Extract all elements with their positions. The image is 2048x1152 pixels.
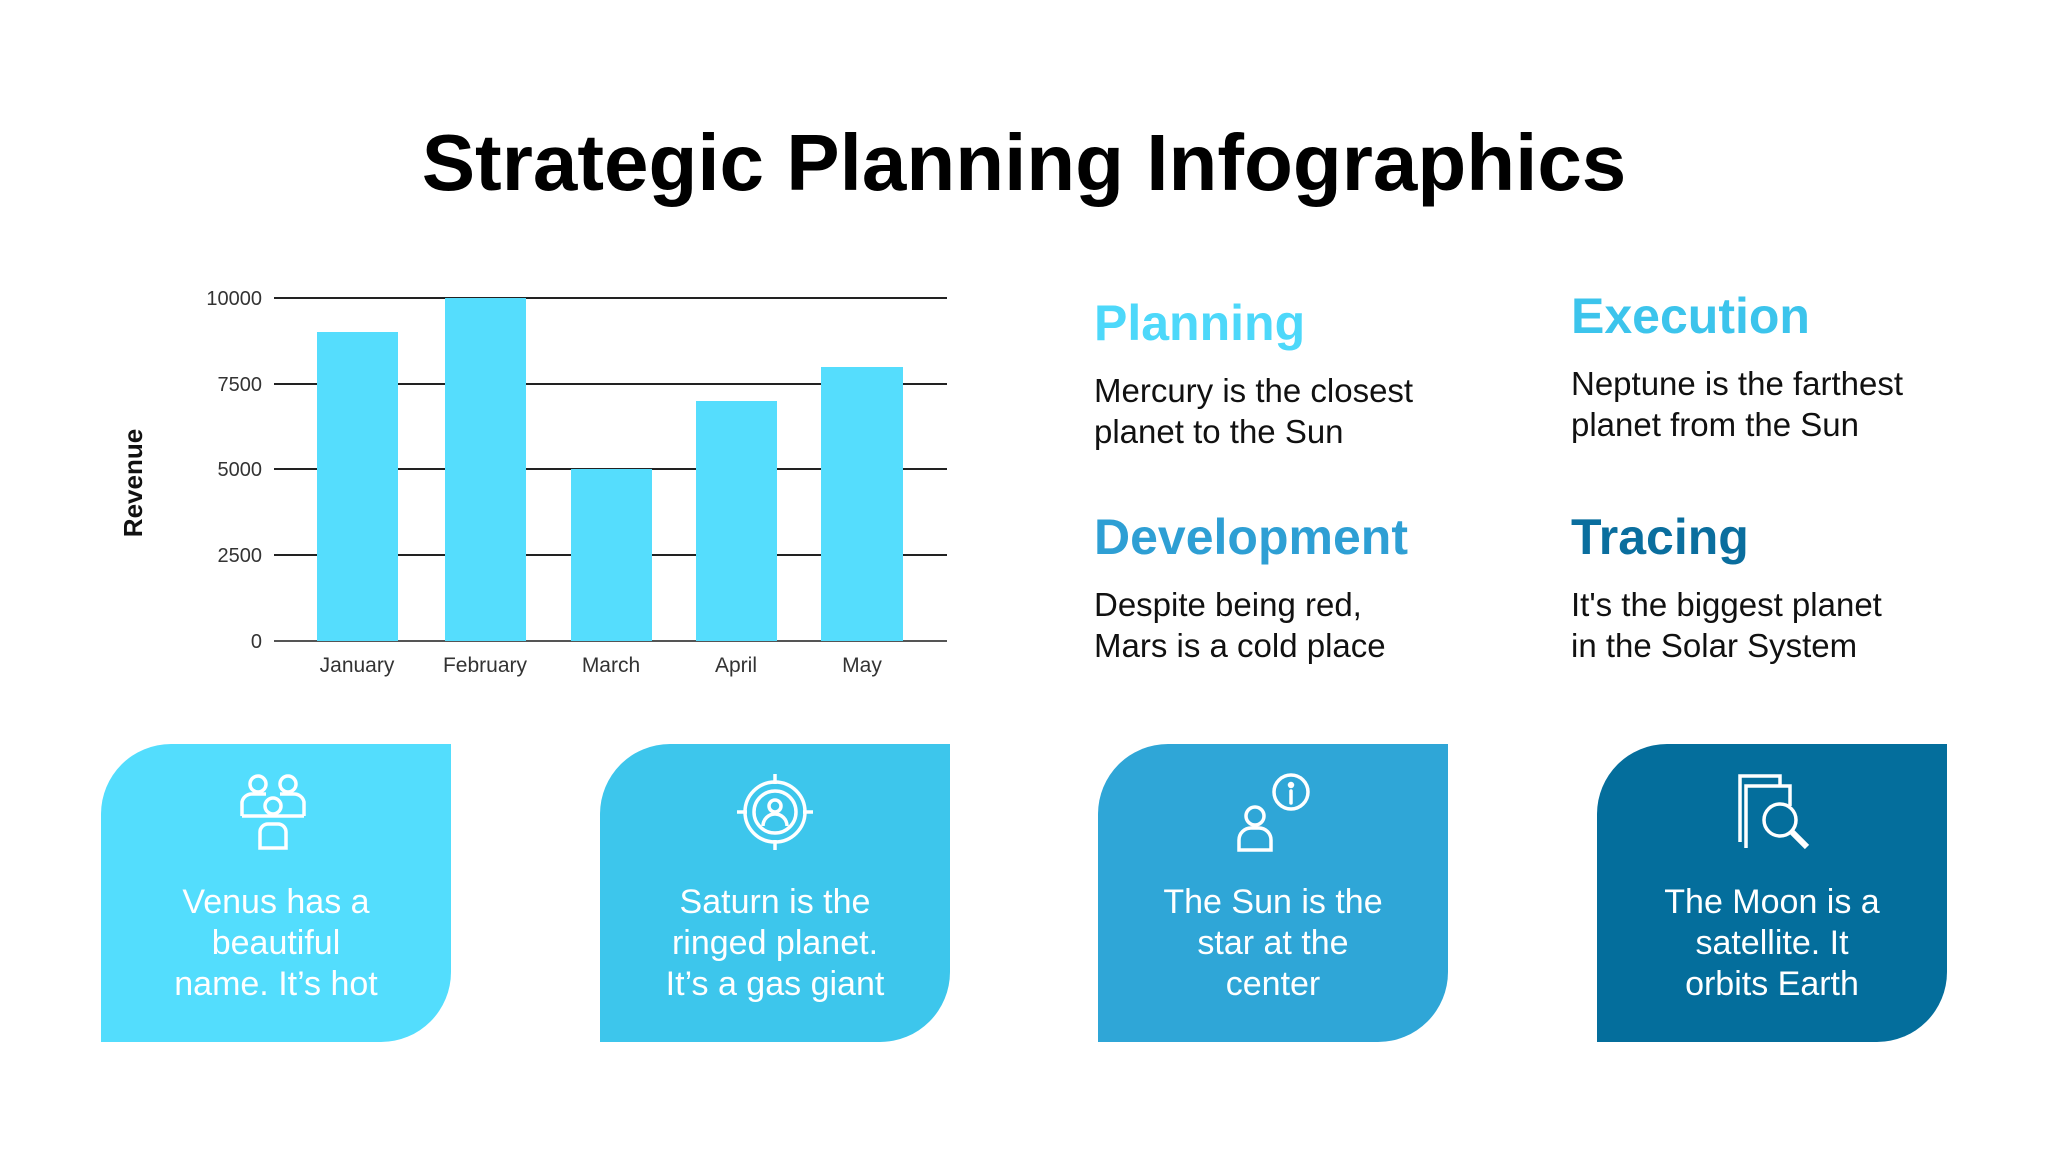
block: execution: planet from the Sun (1571, 406, 1859, 443)
bar chart: 2500 (218, 545, 262, 567)
block: development: Mars is a cold place (1094, 627, 1386, 664)
icon: target person (737, 774, 813, 850)
card: moon: orbits Earth (1685, 965, 1859, 1003)
block: tracing (1571, 509, 1882, 664)
card: venus: beautiful (212, 924, 340, 962)
bar chart: May (842, 654, 882, 677)
bar chart (118, 288, 947, 677)
bar chart: 7500 (218, 374, 262, 396)
card: saturn: Saturn is the (680, 883, 870, 921)
icon: document search (1738, 774, 1810, 850)
card: sun: The Sun is the (1163, 883, 1383, 921)
bar chart: February (443, 654, 528, 677)
card: venus: Venus has a (182, 883, 370, 921)
block: planning: planet to the Sun (1094, 413, 1344, 450)
bar chart: January (320, 654, 395, 677)
block: tracing: in the Solar System (1571, 627, 1857, 664)
block: tracing: Tracing (1571, 509, 1749, 565)
bar chart: 5000 (218, 459, 262, 481)
block: planning (1094, 295, 1413, 450)
bar chart: Revenue (118, 429, 148, 537)
block: execution: Execution (1571, 288, 1810, 344)
card: sun: center (1226, 965, 1320, 1003)
card: moon: The Moon is a (1664, 883, 1880, 921)
block: tracing: It's the biggest planet (1571, 586, 1882, 623)
block: development: Development (1094, 509, 1408, 565)
card: venus (101, 744, 451, 1042)
card: sun: star at the (1197, 924, 1349, 962)
title: Strategic Planning Infographics (422, 118, 1626, 207)
block: execution: Neptune is the farthest (1571, 365, 1903, 402)
card: saturn (600, 744, 950, 1042)
card: venus: name. It’s hot (174, 965, 378, 1003)
icon: person info (1237, 773, 1310, 852)
block: development: Despite being red, (1094, 586, 1362, 623)
bar chart: 0 (251, 631, 262, 653)
card: moon: satellite. It (1695, 924, 1849, 962)
card: moon (1597, 744, 1947, 1042)
icon: people (240, 774, 306, 850)
bar chart: April (715, 654, 757, 677)
bar chart: 10000 (206, 288, 262, 310)
bar chart: March (582, 654, 640, 677)
card: sun (1098, 744, 1448, 1042)
block: execution (1571, 288, 1903, 443)
card: saturn: It’s a gas giant (666, 965, 884, 1003)
block: development (1094, 509, 1408, 664)
block: planning: Mercury is the closest (1094, 372, 1413, 409)
card: saturn: ringed planet. (672, 924, 878, 962)
block: planning: Planning (1094, 295, 1305, 351)
